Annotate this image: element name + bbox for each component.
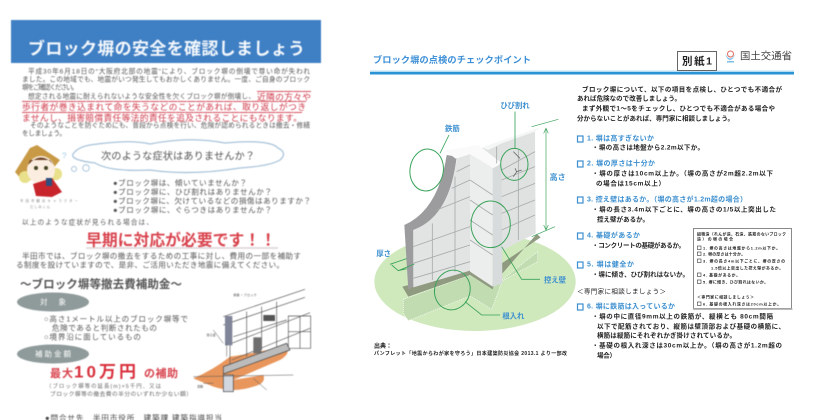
- wall top cap: [445, 145, 501, 168]
- diagram labels: 控え壁: [544, 275, 567, 284]
- masonry wall side box: [693, 228, 792, 310]
- intro text block: 想定される地震に耐えられないような安全性を欠くブロック塀が倒壊し、: [28, 92, 255, 100]
- source credit: パンフレット「地震からわが家を守ろう」日本建築防災協会 2013.1 より一部改: [374, 350, 567, 357]
- crack marks: [513, 152, 522, 177]
- checkpoint 5: [578, 260, 689, 278]
- buttress side face: [493, 163, 502, 287]
- introduction text: ブロック塀について、以下の項目を点検し、ひとつでも不適合が: [582, 84, 782, 94]
- source credit: 出典：: [374, 342, 392, 350]
- masonry wall side box: ＜専門家に相談しましょう＞: [697, 294, 754, 300]
- height dimension: [532, 119, 558, 237]
- foundation: [403, 252, 538, 321]
- checkpoint 1: 1. 塀は高すぎないか: [587, 134, 654, 142]
- masonry wall side box: 6. 基礎の根入れ深さは20cm以上か。: [703, 302, 781, 306]
- checkpoint 4: ・コンクリートの基礎があるか。: [592, 240, 685, 250]
- source credit: [374, 342, 567, 357]
- checkpoint 5: ・塀に傾き、ひび割れはないか。: [592, 270, 689, 278]
- wall structure diagram: 横筋 / ブロック: [233, 292, 257, 297]
- title banner: ブロック塀の安全を確認しましょう: [28, 38, 305, 58]
- ministry logo: [725, 50, 792, 62]
- green ground ellipse: [374, 232, 576, 331]
- checkpoint 6: 横筋は縦筋にそれぞれかぎ掛けされているか。: [597, 330, 736, 340]
- urgent action text: [22, 218, 278, 250]
- block mortar lines: [413, 147, 535, 280]
- checkpoint 3: 控え壁があるか。: [597, 214, 649, 224]
- block wall illustration: [374, 101, 576, 331]
- title banner: [11, 20, 321, 63]
- consult expert note: ＜専門家に相談しましょう＞: [577, 286, 666, 296]
- symptom checklist: ●ブロック塀に、ひび割れはありませんか？: [113, 186, 272, 196]
- intro text block: 平成30年6月18日の“大阪府北部の地震”により、ブロック塀の倒壊で尊い命が失われ: [28, 66, 310, 76]
- diagram labels: 厚さ: [376, 249, 391, 258]
- subsidy calculation note: [46, 382, 192, 398]
- base slab: [402, 234, 541, 297]
- subsidy amount: 最大: [50, 366, 73, 380]
- subsidy calculation note: （ブロック塀等の延長(m)×5千円、又は: [46, 382, 162, 390]
- thought cloud callout: [72, 140, 284, 173]
- subsidy intro text: [16, 250, 301, 270]
- symptom checklist: ●ブロック塀に、ぐらつきはありませんか？: [113, 204, 272, 214]
- red warning text: [22, 91, 311, 123]
- thought cloud callout: 次のような症状はありませんか？: [101, 150, 255, 162]
- checkpoint 2: 2. 塀の厚さは十分か: [587, 158, 655, 168]
- masonry wall side box: 3. 塀の長さ4m以下ごとに、塀の厚さの: [703, 258, 785, 264]
- heading rule: [370, 70, 794, 74]
- introduction text: あれば危険なので改善しましょう。: [577, 94, 681, 102]
- attachment label: [678, 52, 716, 70]
- checkpoint 6: 以下で配筋されており、縦筋は壁頂部および基礎の横筋に、: [597, 322, 785, 330]
- introduction text: [577, 84, 782, 122]
- target criteria: ○高さ1メートル以上のブロック塀等で: [44, 314, 188, 324]
- front wall face: [413, 154, 470, 287]
- target pill: 対 象: [40, 296, 66, 306]
- symptom checklist: ●ブロック塀は、傾いていませんか？: [113, 178, 247, 188]
- masonry wall side box: 組積造（れんが造、石造、鉄筋のないブロック: [697, 232, 786, 236]
- masonry wall side box: 4. 基礎があるか。: [703, 272, 740, 278]
- diagram labels: [376, 101, 567, 320]
- mascot: だしみくん: [30, 204, 51, 209]
- checkpoint 3: ・塀の長さ3.4m以下ごとに、塀の高さの1/5以上突出した: [592, 204, 776, 214]
- target criteria: ○境界沿に面しているもの: [44, 332, 141, 342]
- checkpoint 4: [578, 230, 685, 250]
- right wall face: [482, 131, 536, 251]
- checkpoint 3: 3. 控え壁はあるか。（塀の高さが1.2m超の場合）: [587, 194, 747, 204]
- symptom checklist: [113, 178, 311, 214]
- checkpoint 4: 4. 基礎があるか: [587, 230, 640, 240]
- urgent action text: 早期に対応が必要です！！: [86, 230, 276, 250]
- intro text block: [22, 66, 310, 100]
- mascot: ?: [62, 152, 67, 160]
- checkpoint 1: ・塀の高さは地盤から2.2m以下か。: [592, 142, 704, 152]
- panel: inspection checkpoints sheet: [370, 50, 794, 360]
- introduction text: まず外観で1～5をチェックし、ひとつでも不適合がある場合や: [582, 104, 776, 112]
- checkpoint 1: [578, 134, 704, 152]
- red warning text: ませんし、損害賠償責任等法的責任を追及されることにもなります。: [22, 112, 302, 123]
- intro text block: ました。この地域でも、地震がいつ発生してもおかしくありません。一度、ご自身のブロック: [22, 74, 310, 84]
- checkpoint 6: 6. 塀に鉄筋は入っているか: [587, 302, 675, 310]
- masonry wall side box: 2. 塀の厚さは十分か。: [703, 252, 745, 256]
- maintenance advice text: そのようなことを防ぐためにも、普段から点検を行い、危険が認められるときは撤去・修繕: [30, 120, 310, 130]
- subsidy intro text: る制度を設けていますので、是非、ご活用いただき地震に備えてください。: [16, 260, 284, 270]
- target pill: [17, 292, 89, 312]
- target criteria: 危険であると判断されたもの: [52, 322, 157, 332]
- checkpoint 6: 場合）: [597, 350, 616, 360]
- introduction text: 分からないことがあれば、専門家に相談しましょう。: [577, 114, 734, 122]
- wall structure diagram: 配筋: [197, 384, 203, 389]
- mascot: 半田市観光キャラクター: [20, 198, 79, 203]
- target criteria: [44, 314, 188, 342]
- subsidy intro text: 半田市では、ブロック塀の撤去をするための工事に対し、費用の一部を補助す: [22, 250, 301, 260]
- masonry wall side box: 1. 塀の高さは地盤から1.2m以下か。: [703, 246, 780, 250]
- checkpoint 2: [578, 158, 774, 188]
- checkpoint 6: [578, 302, 785, 360]
- masonry wall side box: 5. 塀に傾き、ひび割れはないか。: [703, 280, 768, 284]
- urgent action text: 以上のような症状が見られる場合は、: [22, 218, 153, 226]
- subsidy amount: [50, 362, 178, 382]
- subsidy amount: の補助: [144, 366, 178, 380]
- checkpoint 6: ・塀の中に直径9mm以上の鉄筋が、縦横とも 80cm間隔: [592, 312, 774, 320]
- attachment label: 別紙1: [682, 54, 712, 68]
- maintenance advice text: [22, 120, 310, 138]
- wall structure diagram: [193, 289, 311, 392]
- checkpoint 3: [578, 194, 776, 224]
- buttress front face: [470, 154, 493, 287]
- wall thickness edge: [404, 155, 457, 290]
- wall structure diagram: 控え壁: [207, 332, 216, 337]
- masonry wall side box: 造）の塀の場合: [697, 236, 733, 242]
- diagram labels: 根入れ: [502, 311, 525, 320]
- masonry wall side box: 1.5倍以上突出した控え壁があるか。: [711, 266, 783, 270]
- mascot: [15, 145, 79, 209]
- diagram labels: ひび割れ: [500, 101, 530, 110]
- checkpoint 2: の場合は15cm以上）: [596, 178, 665, 188]
- checkpoint 6: ・基礎の根入れ深さは30cm以上か。（塀の高さが1.2m超の: [592, 340, 782, 350]
- inspection callout circles: [390, 112, 540, 315]
- subsidy heading: ～ブロック塀等撤去費補助金～: [20, 277, 182, 291]
- sheet heading: ブロック塀の点検のチェックポイント: [373, 54, 531, 65]
- red warning text: 歩行者が巻き込まれて命を失うなどのことがあれば、取り返しがつき: [22, 101, 306, 112]
- subsidy amount: 10万円: [74, 362, 136, 382]
- intro text block: 塀をご確認ください。: [22, 82, 78, 92]
- amount pill: [17, 344, 89, 364]
- checkpoint 5: 5. 塀は健全か: [587, 260, 634, 268]
- symptom checklist: ●ブロック塀に、欠けているなどの損傷はありますか？: [113, 196, 311, 206]
- checkpoint 2: ・塀の厚さは10cm以上か。（塀の高さが2m超2.2m以下: [592, 168, 774, 178]
- maintenance advice text: をしましょう。: [22, 130, 66, 138]
- subsidy calculation note: ブロック塀等の撤去費の半分のいずれか少ない額）: [50, 390, 192, 398]
- amount pill: 補助金額: [35, 348, 72, 358]
- diagram labels: 高さ: [550, 172, 566, 182]
- diagram labels: 鉄筋: [445, 124, 460, 133]
- panel: block wall safety flyer: [11, 20, 321, 420]
- ministry logo: 国土交通省: [740, 50, 792, 62]
- red warning text: 近隣の方々や: [257, 91, 311, 102]
